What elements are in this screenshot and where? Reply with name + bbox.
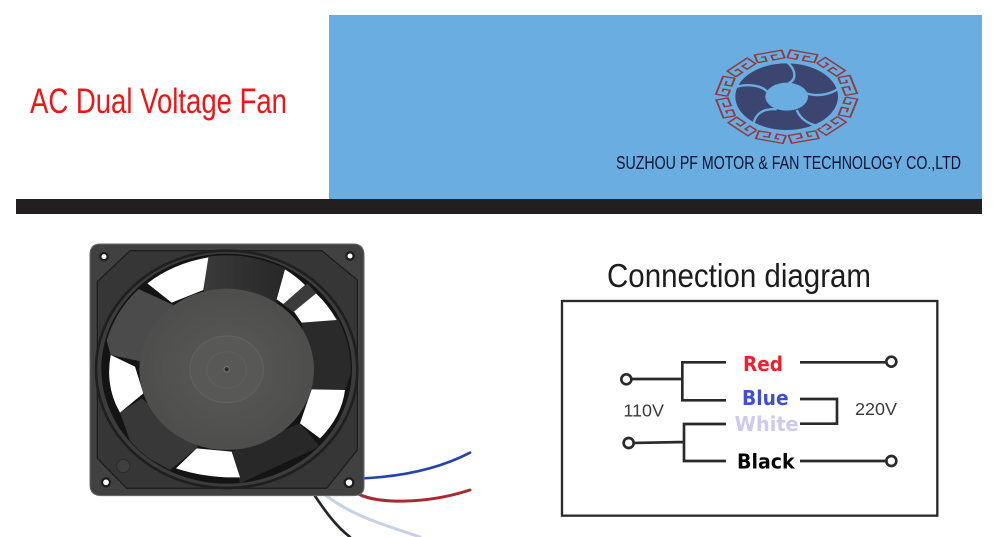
- wires: [315, 453, 470, 537]
- wire labels: [735, 352, 799, 473]
- connection diagram: [562, 301, 937, 516]
- diagram heading: Connection diagram: [607, 257, 871, 294]
- icon: company logo: [716, 50, 857, 143]
- diagram border: [562, 301, 937, 516]
- moulded dot: [117, 459, 130, 473]
- screw holes: [100, 252, 354, 487]
- voltage labels: 110V: [623, 400, 664, 420]
- white gaps between blades: [109, 257, 345, 477]
- wire labels: Black: [737, 449, 795, 473]
- hub: [139, 289, 314, 450]
- terminals: [621, 357, 896, 466]
- header blue panel: [329, 15, 982, 199]
- fan photo: [90, 244, 470, 537]
- wire labels: White: [735, 412, 799, 436]
- blades: [100, 250, 357, 483]
- fan frame: [90, 244, 364, 496]
- wire labels: Blue: [742, 386, 789, 410]
- voltage labels: [623, 399, 897, 420]
- title: AC Dual Voltage Fan: [30, 82, 287, 121]
- wire labels: Red: [743, 352, 783, 376]
- wiring lines: [632, 362, 885, 461]
- header black bar: [16, 199, 982, 214]
- frame inset outline: [97, 251, 357, 488]
- fan opening rings: [95, 249, 359, 489]
- voltage labels: 220V: [855, 399, 897, 419]
